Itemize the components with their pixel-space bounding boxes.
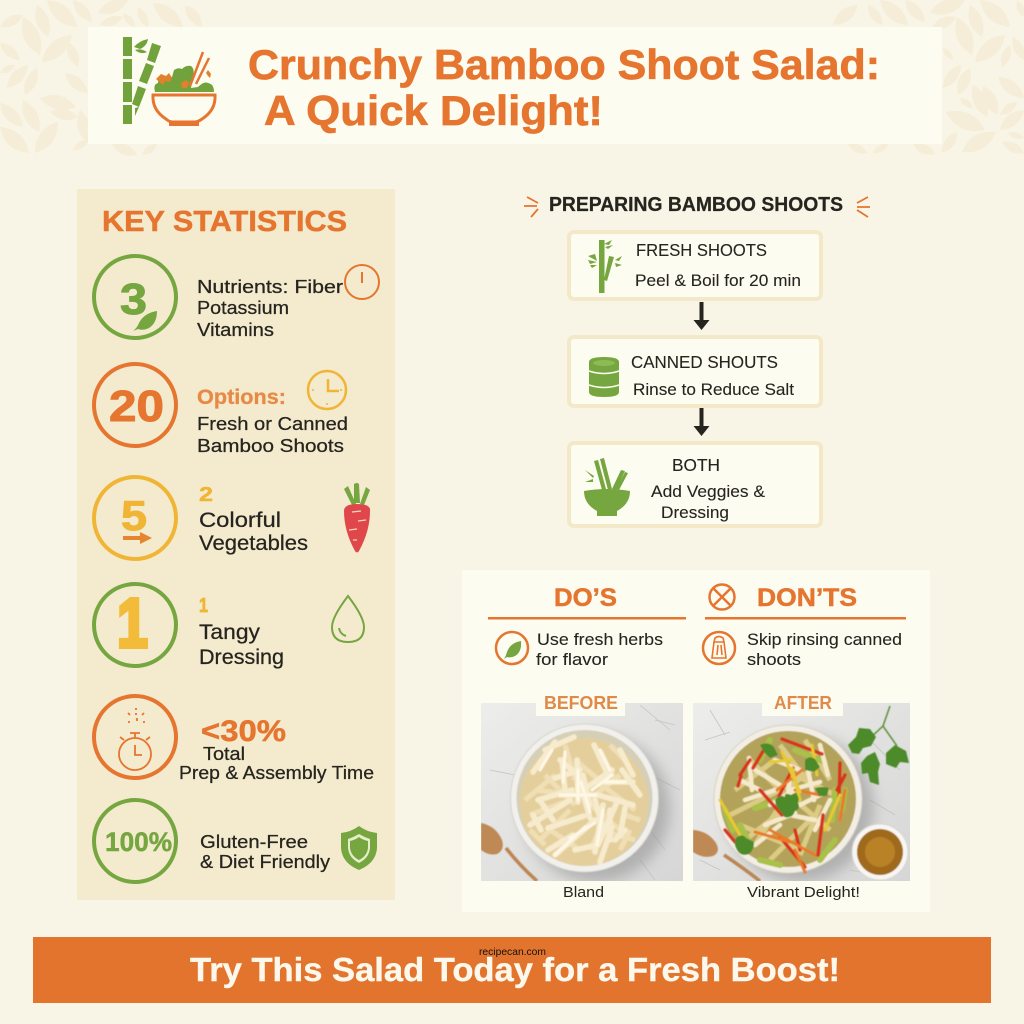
step: canned shouts: [569, 337, 821, 406]
stat: 100 percent gluten-free: 100%: [105, 827, 172, 857]
stat: 5 colorful vegetables: Vegetables: [199, 532, 308, 555]
photo: after, colourful salad in bowl: [693, 703, 910, 882]
call-to-action banner: [33, 937, 991, 1003]
stat: 1 tangy dressing: 1: [199, 595, 208, 617]
don'ts column: Skip rinsing canned: [747, 630, 902, 649]
title: A Quick Delight!: [264, 87, 603, 134]
step: fresh shoots: Peel & Boil for 20 min: [635, 271, 801, 290]
stat: 3 nutrients: [94, 256, 379, 340]
icon: green bowl: [584, 458, 630, 516]
stat: 1 tangy dressing: Dressing: [199, 646, 284, 669]
step: canned shouts: Rinse to Reduce Salt: [633, 380, 794, 399]
stat: 5 colorful vegetables: [94, 477, 370, 559]
icon: leaf badge: [496, 632, 528, 664]
icon: stopwatch: [119, 708, 151, 770]
header banner: [88, 27, 942, 144]
heading: preparing bamboo shoots: PREPARING BAMBOO SHOOTS: [549, 194, 843, 216]
caption: vibrant delight: Vibrant Delight!: [747, 884, 860, 901]
icon: can: [589, 357, 619, 397]
arrow: [694, 408, 710, 436]
icon: orange timer: [345, 265, 379, 299]
icon: crossed circle: [710, 584, 734, 610]
stat: under 30 percent time: Prep & Assembly Time: [179, 763, 374, 783]
step: canned shouts: CANNED SHOUTS: [631, 352, 778, 372]
stat: 1 tangy dressing: [94, 584, 364, 669]
do's column: Use fresh herbs: [537, 630, 663, 649]
don'ts column: [703, 584, 906, 669]
stat: 100 percent gluten-free: [94, 800, 377, 882]
section: preparing bamboo shoots: [524, 194, 870, 526]
stat: 3 nutrients: Potassium: [197, 298, 289, 318]
step: both: Dressing: [661, 503, 729, 522]
after label: AFTER: [774, 693, 832, 713]
icon: carrot: [344, 483, 370, 552]
icon: dressing dish: [852, 824, 908, 880]
step: both: BOTH: [672, 455, 720, 475]
caption: bland: Bland: [563, 884, 604, 901]
source credit: recipecan.com: [479, 947, 546, 958]
stat: 1 tangy dressing: Tangy: [199, 621, 261, 644]
step: fresh shoots: FRESH SHOOTS: [636, 240, 767, 260]
stat: 3 nutrients: 3: [120, 275, 147, 324]
don'ts column: shoots: [747, 650, 801, 669]
do's column: for flavor: [536, 650, 608, 669]
stat: under 30 percent time: Total: [203, 744, 245, 764]
icon: parsley: [848, 706, 909, 785]
stat: 3 nutrients: Vitamins: [197, 320, 274, 340]
icon: drop: [332, 596, 364, 642]
before label: BEFORE: [544, 693, 618, 713]
stat: 5 colorful vegetables: 2: [199, 484, 213, 506]
do's column: DO’S: [554, 584, 617, 612]
title: [248, 41, 880, 134]
stat: 20 options: 20: [109, 382, 164, 431]
title: Crunchy Bamboo Shoot Salad:: [248, 41, 880, 88]
panel: key statistics: [77, 189, 395, 900]
stat: 1 tangy dressing: 1: [117, 584, 148, 662]
don'ts column: DON’TS: [757, 584, 857, 612]
stat: 20 options: Options:: [197, 386, 286, 409]
stat: under 30 percent time: [94, 696, 374, 783]
after label: [762, 690, 843, 716]
step: both: Add Veggies &: [651, 482, 766, 501]
icon: bamboo and salad bowl: [123, 37, 215, 126]
arrow: [694, 302, 710, 330]
stat: 5 colorful vegetables: 5: [121, 492, 147, 539]
stat: 100 percent gluten-free: & Diet Friendly: [200, 852, 330, 872]
panel: do's and don'ts with before and after: [462, 570, 930, 912]
icon: bamboo: [588, 240, 622, 293]
photo: before, plain bamboo shoots in bowl: [481, 703, 683, 882]
stat: 100 percent gluten-free: Gluten-Free: [200, 832, 308, 852]
icon: salt shaker badge: [703, 632, 735, 664]
stat: 3 nutrients: Nutrients: Fiber: [197, 277, 343, 297]
stat: 20 options: [94, 364, 348, 456]
step: fresh shoots: [569, 232, 821, 299]
stat: 20 options: Bamboo Shoots: [197, 436, 344, 456]
icon: shield: [341, 826, 377, 870]
stat: 20 options: Fresh or Canned: [197, 414, 348, 434]
stat: 5 colorful vegetables: Colorful: [199, 509, 281, 532]
heading: key statistics: KEY STATISTICS: [102, 206, 347, 238]
icon: yellow clock: [308, 371, 346, 409]
call-to-action text: Try This Salad Today for a Fresh Boost!: [190, 951, 840, 988]
before label: [536, 690, 625, 716]
step: both: [569, 443, 821, 526]
do's column: [488, 584, 686, 669]
stat: under 30 percent time: <30%: [201, 715, 286, 748]
